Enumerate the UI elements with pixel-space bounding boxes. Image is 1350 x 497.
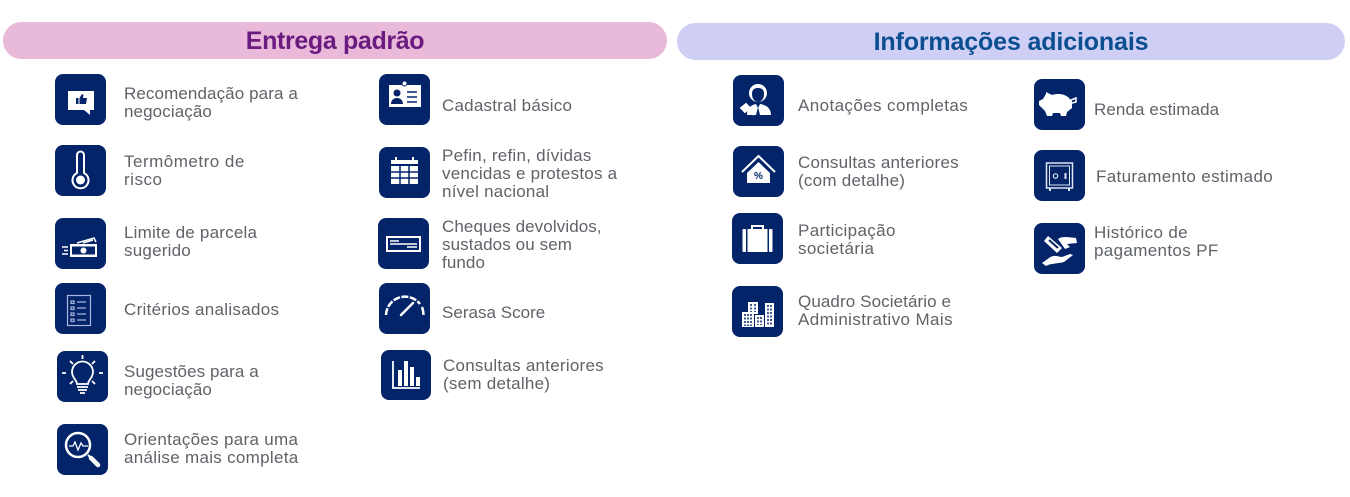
text: Recomendação para a negociação: Recomendação para a: [124, 84, 298, 103]
icon: office buildings: [732, 286, 783, 337]
icon: briefcase: [732, 213, 783, 264]
text: Recomendação para a negociação: [124, 84, 298, 121]
text: Quadro Societário e Administrativo Mais: Administrativo Mais: [798, 310, 953, 329]
text: Quadro Societário e Administrativo Mais: Quadro Societário e: [798, 292, 951, 311]
text: Histórico de pagamentos PF: pagamentos PF: [1094, 241, 1219, 260]
text: Cheques devolvidos, sustados ou sem fundo: Cheques devolvidos,: [442, 217, 602, 236]
icon: bar chart: [381, 350, 431, 400]
heading bar: Informações adicionais: Informações adicionais: [874, 28, 1148, 56]
heading bar: Entrega padrão: Entrega padrão: [246, 27, 424, 55]
icon: house with percent: [733, 146, 784, 197]
icon: safe: [1034, 150, 1085, 201]
icon: magnifier with pulse: [57, 424, 108, 475]
icon: lawyer with gavel: [733, 75, 784, 126]
text: Participação societária: Participação: [798, 221, 896, 240]
text: Consultas anteriores (sem detalhe): (sem detalhe): [443, 374, 550, 393]
text: Histórico de pagamentos PF: Histórico de: [1094, 223, 1188, 242]
text: Recomendação para a negociação: negociação: [124, 102, 212, 121]
text: Consultas anteriores (sem detalhe): Consultas anteriores: [443, 356, 604, 375]
text: Termômetro de risco: risco: [124, 170, 162, 189]
icon: criteria checklist: [55, 283, 106, 334]
icon: thermometer: [55, 145, 106, 196]
text: Faturamento estimado: Faturamento estimado: [1096, 167, 1273, 186]
text: Renda estimada: Renda estimada: [1094, 100, 1219, 119]
heading bar: Entrega padrão: [3, 22, 667, 59]
text: Consultas anteriores (sem detalhe): [443, 356, 604, 393]
text: Orientações para uma análise mais completa: análise mais completa: [124, 448, 298, 467]
text: Pefin, refin, dívidas vencidas e protestos a nível nacional: Pefin, refin, dívidas: [442, 146, 592, 165]
icon: calendar: [379, 147, 430, 198]
heading bar: Informações adicionais: [677, 23, 1345, 60]
text: Pefin, refin, dívidas vencidas e protestos a nível nacional: vencidas e protestos a: [442, 164, 617, 183]
text: Serasa Score: Serasa Score: [442, 303, 545, 322]
text: Sugestões para a negociação: Sugestões para a: [124, 362, 259, 381]
text: Consultas anteriores (com detalhe): [798, 153, 959, 190]
text: Sugestões para a negociação: negociação: [124, 380, 212, 399]
text: Critérios analisados: Critérios analisados: [124, 300, 279, 319]
icon: piggy bank: [1034, 79, 1085, 130]
text: Termômetro de risco: Termômetro de: [124, 152, 245, 171]
text: Cheques devolvidos, sustados ou sem fundo: fundo: [442, 253, 485, 272]
text: Orientações para uma análise mais completa: Orientações para uma: [124, 430, 298, 449]
icon: score gauge: [379, 283, 430, 334]
text: Sugestões para a negociação: [124, 362, 259, 399]
icon: ID badge: [379, 74, 430, 125]
text: Termômetro de risco: [124, 152, 245, 189]
icon: hand giving money: [1034, 223, 1085, 274]
icon: thumbs up speech bubble: [55, 74, 106, 125]
text: Pefin, refin, dívidas vencidas e protestos a nível nacional: nível nacional: [442, 182, 549, 201]
text: Limite de parcela sugerido: Limite de parcela: [124, 223, 257, 242]
text: Cheques devolvidos, sustados ou sem fundo: [442, 217, 602, 272]
text: Limite de parcela sugerido: [124, 223, 257, 260]
text: Consultas anteriores (com detalhe): (com detalhe): [798, 171, 905, 190]
text: Consultas anteriores (com detalhe): Consultas anteriores: [798, 153, 959, 172]
text: Cadastral básico: Cadastral básico: [442, 96, 572, 115]
icon: cheque: [378, 218, 429, 269]
text: Pefin, refin, dívidas vencidas e protestos a nível nacional: [442, 146, 618, 201]
text: Histórico de pagamentos PF: [1094, 223, 1219, 260]
text: Anotações completas: Anotações completas: [798, 96, 968, 115]
text: Cheques devolvidos, sustados ou sem fundo: sustados ou sem: [442, 235, 572, 254]
text: Quadro Societário e Administrativo Mais: [798, 292, 953, 329]
text: Participação societária: [798, 221, 896, 258]
text: Limite de parcela sugerido: sugerido: [124, 241, 191, 260]
icon: light bulb: [57, 351, 108, 402]
icon: house with percent: %: [754, 171, 763, 182]
icon: banknotes: [55, 218, 106, 269]
text: Orientações para uma análise mais completa: [124, 430, 298, 467]
text: Participação societária: societária: [798, 239, 874, 258]
